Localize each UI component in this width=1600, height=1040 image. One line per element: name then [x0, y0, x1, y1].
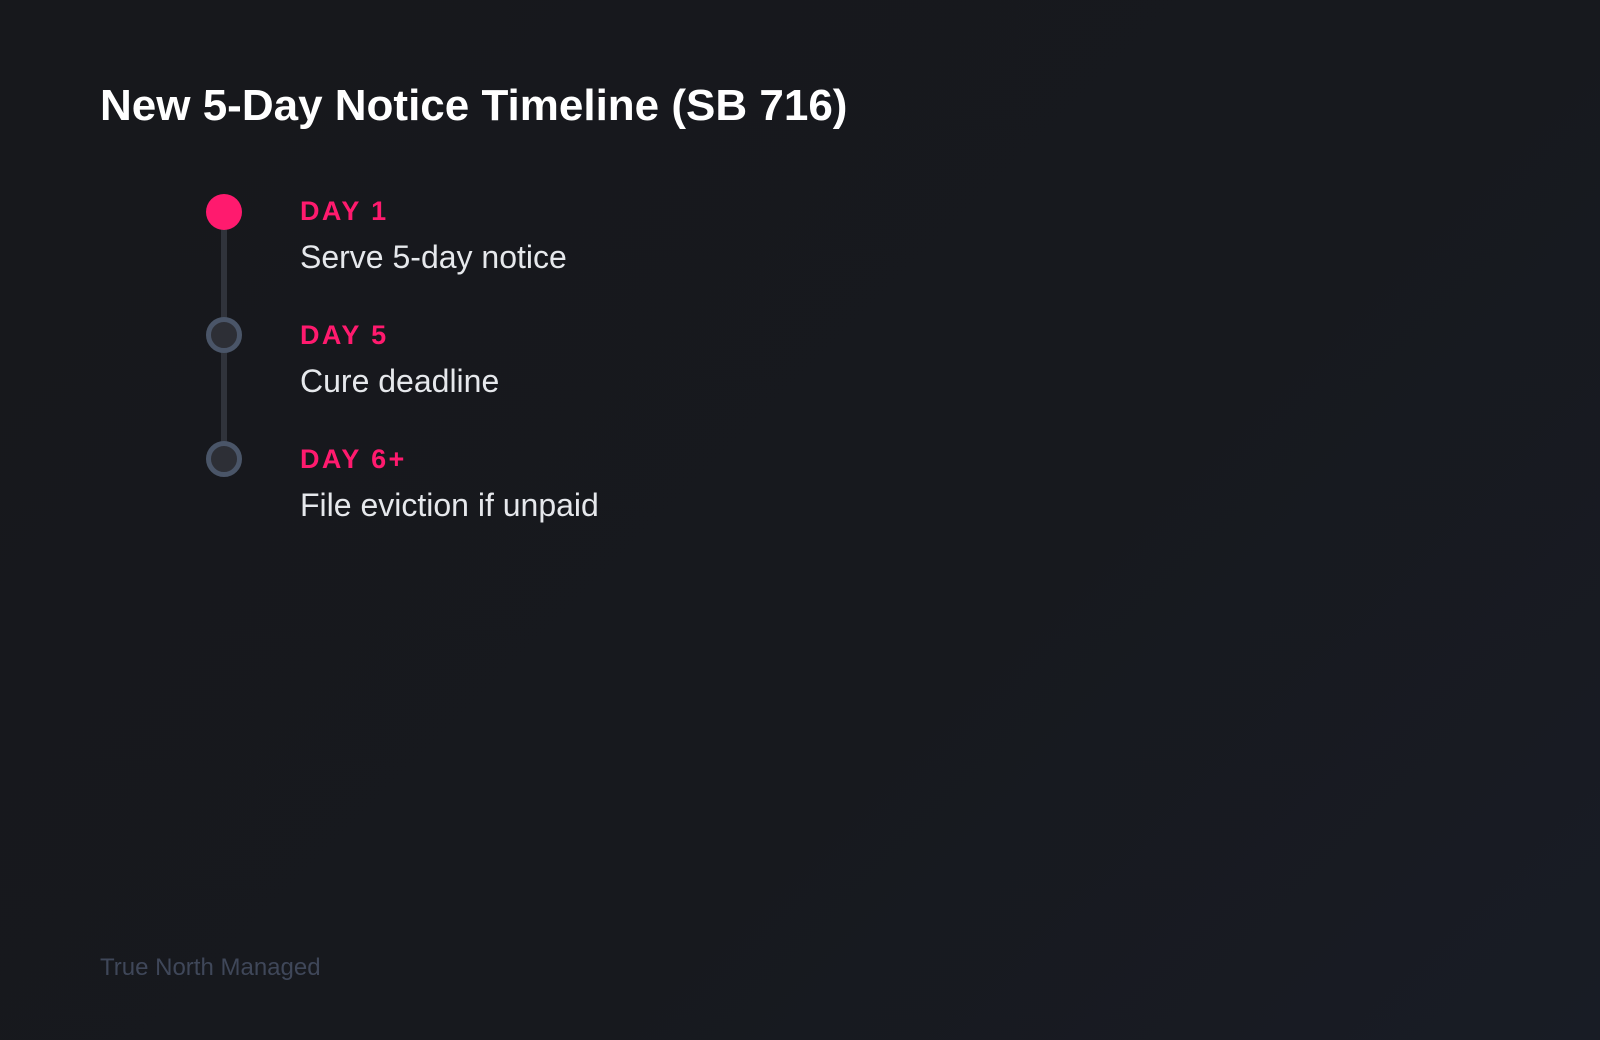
marker: day 1 — [206, 194, 242, 230]
step: day 1 — [206, 194, 567, 275]
step: day 6+ — [206, 441, 599, 523]
title: New 5-Day Notice Timeline (SB 716) — [100, 81, 847, 130]
step: day 5 — [206, 317, 499, 399]
label: day 1: DAY 1 — [300, 196, 389, 226]
text: day 5: Cure deadline — [300, 363, 499, 399]
timeline — [206, 194, 599, 523]
marker: day 5 — [206, 317, 242, 353]
label: day 5: DAY 5 — [300, 320, 389, 350]
text: day 1: Serve 5-day notice — [300, 239, 567, 275]
text: day 6+: File eviction if unpaid — [300, 487, 599, 523]
footer: True North Managed — [100, 954, 321, 981]
marker: day 6+ — [206, 441, 242, 477]
label: day 6+: DAY 6+ — [300, 444, 407, 474]
